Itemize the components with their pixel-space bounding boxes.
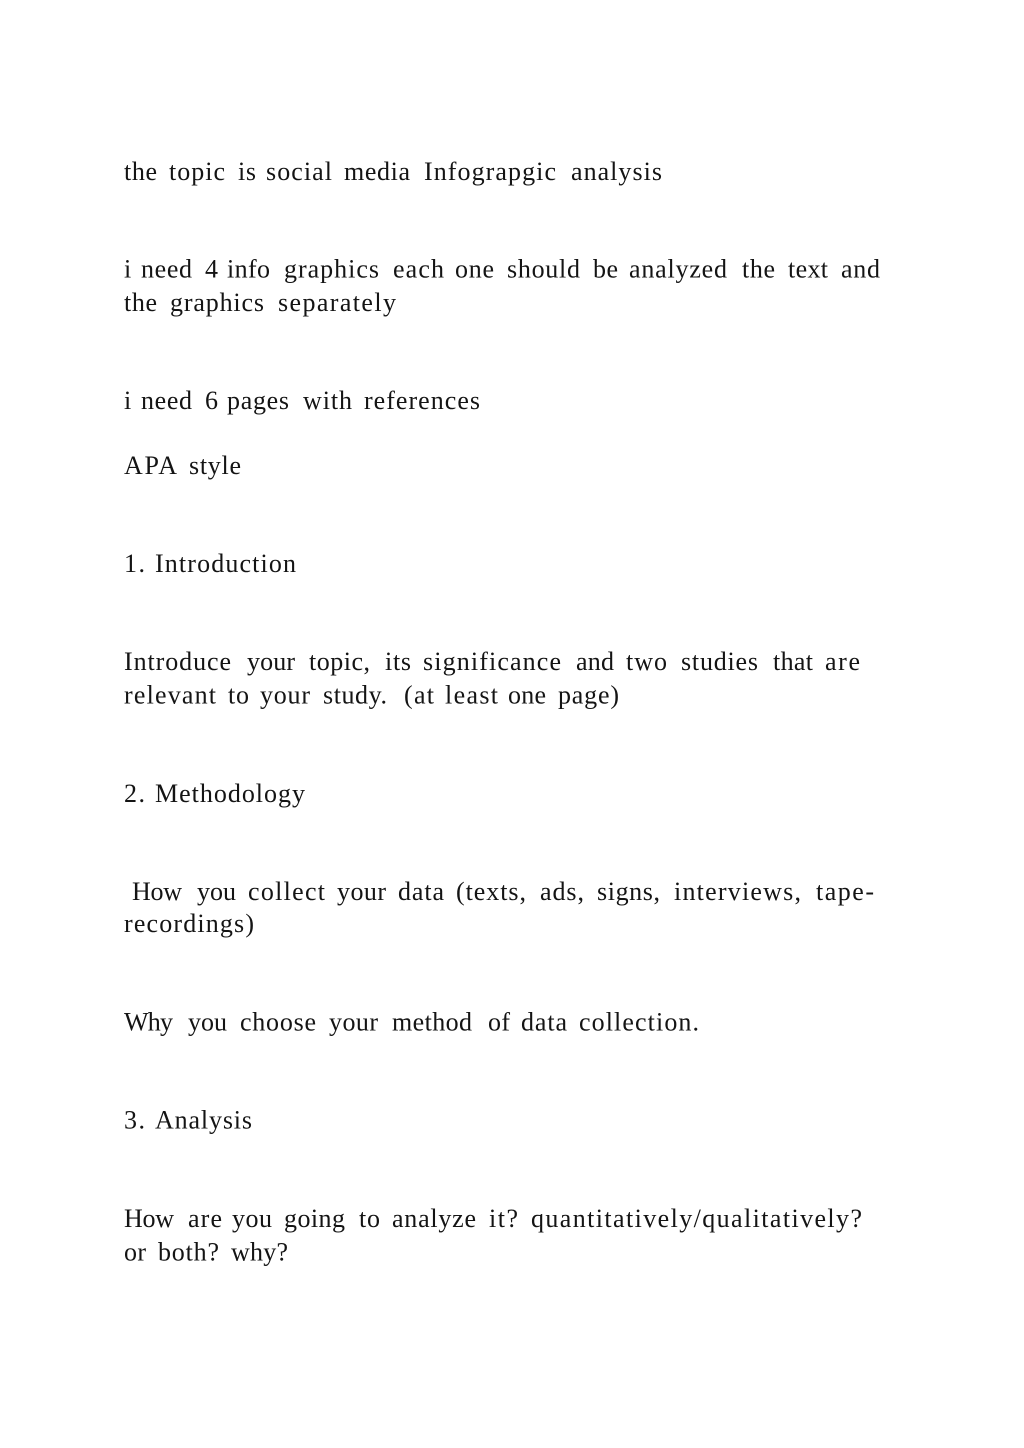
text block: infographics requirement: separately <box>278 288 396 317</box>
text block: topic <box>124 157 662 186</box>
text block: topic: media <box>344 157 410 186</box>
text block: infographics requirement: should <box>507 254 580 284</box>
text block: introduction instructions: and <box>576 647 614 676</box>
text block: introduction instructions: its <box>385 647 411 676</box>
text block: methodology instructions: your <box>337 877 386 906</box>
text block: methodology instructions: you <box>197 877 236 906</box>
text block: infographics requirement: info <box>227 254 270 284</box>
text block: infographics requirement: the <box>742 254 775 284</box>
text block: introduction instructions: relevant <box>124 680 217 710</box>
text block: infographics requirement: 4 <box>205 254 218 284</box>
text block: methodology instructions <box>124 877 874 938</box>
text block: methodology instructions: data <box>398 877 444 906</box>
text block: introduction instructions: least <box>445 680 499 710</box>
text block: data collection rationale: Why <box>124 1008 173 1036</box>
text block: page requirement: 6 <box>205 386 218 415</box>
text block: topic: Infograpgic <box>424 157 556 186</box>
text block: analysis instructions: going <box>284 1204 345 1233</box>
text block: topic: the <box>124 157 157 186</box>
text block: analysis instructions: analyze <box>392 1204 476 1233</box>
text block: infographics requirement: need <box>141 254 192 284</box>
text block: introduction instructions: topic, <box>309 647 370 676</box>
heading: introduction: Introduction <box>155 549 296 578</box>
text block: page requirement <box>124 386 480 415</box>
text block: topic: is <box>238 157 256 186</box>
text block: analysis instructions: to <box>359 1204 380 1233</box>
text block: infographics requirement: analyzed <box>629 254 727 284</box>
text block: methodology instructions: collect <box>248 877 326 906</box>
text block: introduction instructions: to <box>228 680 249 710</box>
text block: page requirement: need <box>141 386 192 415</box>
text block: introduction instructions: your <box>247 647 295 676</box>
heading: analysis: 3. <box>124 1106 145 1134</box>
heading: methodology: 2. <box>124 779 145 808</box>
text block: analysis instructions: are <box>188 1204 222 1233</box>
text block: analysis instructions: you <box>232 1204 272 1233</box>
text block: infographics requirement: one <box>455 254 494 284</box>
text block: methodology instructions: How <box>132 877 182 906</box>
text block: introduction instructions: that <box>773 647 814 676</box>
text block: data collection rationale <box>124 1008 699 1036</box>
text block: infographics requirement <box>124 254 880 317</box>
text block: page requirement: i <box>124 386 131 415</box>
text block: introduction instructions: study. <box>323 680 387 710</box>
text block: methodology instructions: interviews, <box>674 877 801 906</box>
text block: infographics requirement: be <box>593 254 618 284</box>
heading: analysis: Analysis <box>155 1106 252 1134</box>
text block: analysis instructions: quantitatively/qualitatively? <box>531 1204 862 1233</box>
text block: data collection rationale: of <box>488 1008 510 1036</box>
text block: methodology instructions: recordings) <box>124 909 254 938</box>
text block: infographics requirement: graphics <box>170 288 264 317</box>
text block: analysis instructions: both? <box>158 1238 219 1266</box>
text block: citation style: APA <box>124 451 177 480</box>
text block: analysis instructions: why? <box>231 1238 288 1266</box>
text block: infographics requirement: text <box>788 254 829 284</box>
text block: infographics requirement: graphics <box>284 254 379 284</box>
text block: data collection rationale: choose <box>240 1008 316 1036</box>
text block: methodology instructions: signs, <box>597 877 660 906</box>
text block: introduction instructions: Introduce <box>124 647 231 676</box>
text block: analysis instructions: How <box>124 1204 174 1233</box>
text block: introduction instructions: are <box>825 647 860 676</box>
text block: introduction instructions: one <box>508 680 546 710</box>
text block: methodology instructions: (texts, <box>456 877 526 906</box>
text block: data collection rationale: method <box>392 1008 472 1036</box>
text block: introduction instructions: significance <box>423 647 561 676</box>
text block: topic: analysis <box>571 157 662 186</box>
text block: page requirement: pages <box>227 386 289 415</box>
text block: data collection rationale: data <box>521 1008 567 1036</box>
text block: topic: topic <box>169 157 225 186</box>
text block: citation style: style <box>189 451 241 480</box>
heading: introduction: 1. <box>124 549 145 578</box>
text block: data collection rationale: collection. <box>579 1008 699 1036</box>
text block: infographics requirement: and <box>841 254 880 284</box>
text block: data collection rationale: you <box>188 1008 227 1036</box>
text block: introduction instructions: your <box>260 680 310 710</box>
text block: topic: social <box>266 157 332 186</box>
text block: infographics requirement: the <box>124 288 157 317</box>
text block: infographics requirement: each <box>393 254 444 284</box>
text block: analysis instructions: it? <box>489 1204 518 1233</box>
text block: introduction instructions: studies <box>681 647 758 676</box>
text block: infographics requirement: i <box>124 254 131 284</box>
text block: methodology instructions: ads, <box>540 877 584 906</box>
heading: methodology: Methodology <box>155 779 305 808</box>
text block: analysis instructions: or <box>124 1238 146 1266</box>
text block: page requirement: with <box>303 386 352 415</box>
text block: introduction instructions: two <box>626 647 667 676</box>
text block: citation style <box>124 451 241 480</box>
text block: introduction instructions: page) <box>558 680 619 710</box>
text block: introduction instructions: (at <box>404 680 435 710</box>
text block: methodology instructions: tape- <box>816 877 874 906</box>
text block: page requirement: references <box>364 386 480 415</box>
text block: introduction instructions <box>124 647 860 710</box>
text block: data collection rationale: your <box>329 1008 378 1036</box>
text block: analysis instructions <box>124 1204 862 1266</box>
